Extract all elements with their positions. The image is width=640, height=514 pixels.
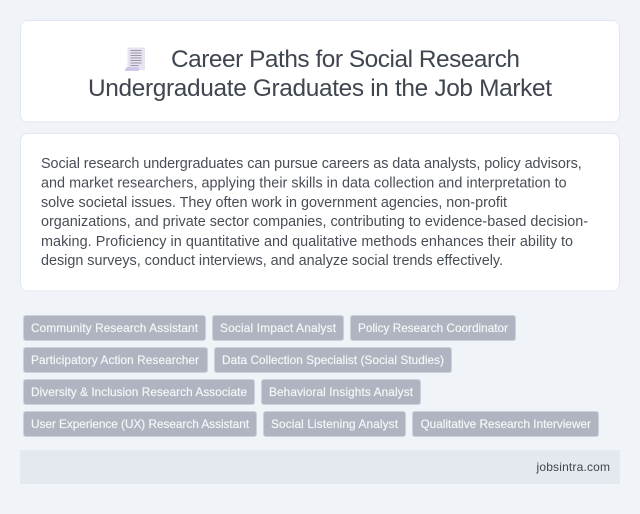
- text block: description: solve societal issues. They often work in government agencies, non-profit: [41, 195, 507, 211]
- text block: description: design surveys, conduct interviews, and analyze social trends effectively.: [41, 253, 503, 269]
- text block: description: and market researchers, applying their skills in data collection and interpretation to: [41, 176, 567, 192]
- title: Undergraduate Graduates in the Job Market: [88, 75, 552, 102]
- text block: description: making. Proficiency in quantitative and qualitative methods enhances their ability to: [41, 234, 573, 250]
- icon: document scroll: [125, 48, 145, 71]
- text block: description: Social research undergraduates can pursue careers as data analysts, policy advisors,: [41, 156, 582, 172]
- tag: Policy Research Coordinator: [350, 316, 516, 340]
- tag: Social Impact Analyst: Social Impact Analyst: [220, 321, 337, 335]
- tag: Qualitative Research Interviewer: [412, 412, 598, 436]
- tag: Social Impact Analyst: [212, 316, 344, 340]
- panel: header: [20, 20, 620, 122]
- tag: Participatory Action Researcher: Participatory Action Researcher: [31, 353, 199, 367]
- tag: User Experience (UX) Research Assistant: User Experience (UX) Research Assistant: [31, 417, 250, 431]
- tag: Behavioral Insights Analyst: [262, 380, 420, 404]
- tag: Behavioral Insights Analyst: Behavioral Insights Analyst: [269, 385, 414, 399]
- footer: jobsintra.com: [536, 460, 610, 474]
- tag: Data Collection Specialist (Social Studies): [214, 348, 452, 372]
- text block: description: organizations, and private sector companies, contributing to evidence-based decision-: [41, 214, 588, 230]
- footer: [20, 450, 620, 484]
- tag: Diversity & Inclusion Research Associate: Diversity & Inclusion Research Associate: [31, 385, 247, 399]
- tag: Policy Research Coordinator: Policy Research Coordinator: [358, 321, 508, 335]
- tag: Participatory Action Researcher: [24, 348, 208, 372]
- title: [88, 46, 552, 102]
- tag: Social Listening Analyst: Social Listening Analyst: [271, 417, 399, 431]
- tag: Community Research Assistant: Community Research Assistant: [31, 321, 199, 335]
- tag: Qualitative Research Interviewer: Qualitative Research Interviewer: [420, 417, 591, 431]
- tag: Data Collection Specialist (Social Studies): Data Collection Specialist (Social Studies): [222, 353, 444, 367]
- panel: description: [20, 134, 620, 291]
- panel: career tags: [24, 316, 598, 436]
- tag: Social Listening Analyst: [264, 412, 406, 436]
- title: Career Paths for Social Research: [171, 46, 520, 73]
- text block: description: [41, 156, 588, 269]
- tag: User Experience (UX) Research Assistant: [24, 412, 256, 436]
- tag: Diversity & Inclusion Research Associate: [24, 380, 254, 404]
- tag: Community Research Assistant: [24, 316, 206, 340]
